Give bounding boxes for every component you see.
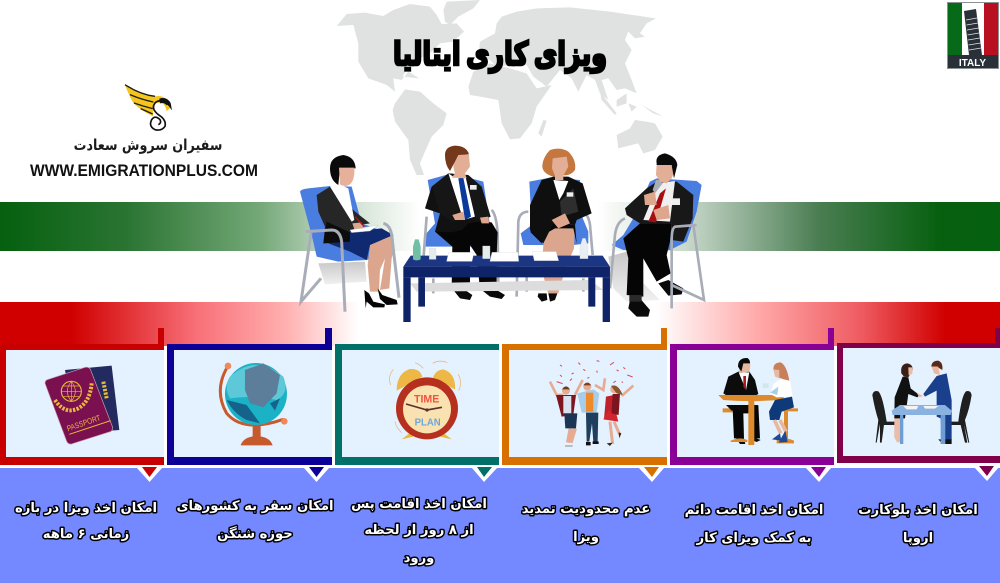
card 2: schengen travel [167,328,334,542]
card 3: residence after 8 days [335,344,499,566]
clock word plan: PLAN [415,417,441,428]
clear bottle [580,238,588,259]
person: woman taking notes [300,155,399,312]
card pointer [137,468,162,482]
icon: two people at cafe table [718,358,798,445]
logo persian name: سفیران سروش سعادت [74,137,222,154]
card caption: امکان سفر به کشورهای [176,499,334,514]
background: green flag band left [0,202,420,251]
table papers [447,252,559,261]
icon: leaning tower [964,9,982,55]
card caption: از ۸ روز از لحظه [364,523,474,538]
person: man with blue tie [423,146,505,300]
chair [300,186,393,262]
icon: passports [45,366,119,444]
card caption [858,503,978,546]
card caption: حوزه شنگن [217,526,293,542]
card caption [685,503,823,546]
card pointer [974,467,999,481]
italy flag badge [947,2,999,69]
icon: winged bird [125,85,172,130]
background: world map [337,0,663,175]
card caption: اروپا [903,531,933,546]
card pointer [806,468,831,482]
bottom text area [0,468,1000,583]
card pointer [639,468,664,482]
card caption: ویزا [573,530,599,545]
flag label: ITALY [959,58,986,69]
chair [425,173,490,247]
passport label: PASSPORT [66,413,102,433]
background: green flag band right [598,202,1000,251]
card 1: visa in 6 months [0,328,164,542]
card caption: امکان اخذ اقامت دائم [685,503,823,518]
title: ویزای کاری ایتالیا [393,35,607,73]
icon: globe [220,363,288,445]
card caption: امکان اخذ اقامت پس [351,497,487,512]
card 4: no renewal limit [502,328,667,545]
card caption: به کمک ویزای کار [696,531,811,546]
illustration: panel discussion [300,146,704,322]
card caption: امکان اخذ ویزا در بازه [15,501,157,516]
table [403,238,610,322]
background: red flag band left [0,302,358,346]
card caption: ورود [404,551,434,566]
card caption: امکان اخذ بلوکارت [858,503,978,518]
person: woman with auburn hair [517,149,593,302]
website url: WWW.EMIGRATIONPLUS.COM [30,161,258,180]
icon: celebrating people [550,361,633,447]
card caption [522,502,650,545]
card pointer [472,468,497,482]
seat shadow [318,262,367,284]
card caption [15,501,157,542]
card caption [351,497,487,566]
person: man with microphone and red tie [608,153,704,317]
clock word time: TIME [414,394,439,406]
card caption [176,499,334,542]
card pointer [304,468,329,482]
water bottle green [413,239,421,260]
card 6: europe blue card [837,328,1000,546]
card caption: عدم محدودیت تمدید [522,502,650,517]
background: red flag band right [656,302,1000,346]
card 5: permanent residence [670,328,834,546]
seat shadow [608,252,660,302]
icon: alarm clock [389,361,461,439]
logo [30,85,258,180]
chair [612,178,702,250]
chair [521,178,588,245]
icon: handshake at table [872,361,972,444]
card caption: زمانی ۶ ماهه [43,527,129,542]
water glass [429,246,490,259]
